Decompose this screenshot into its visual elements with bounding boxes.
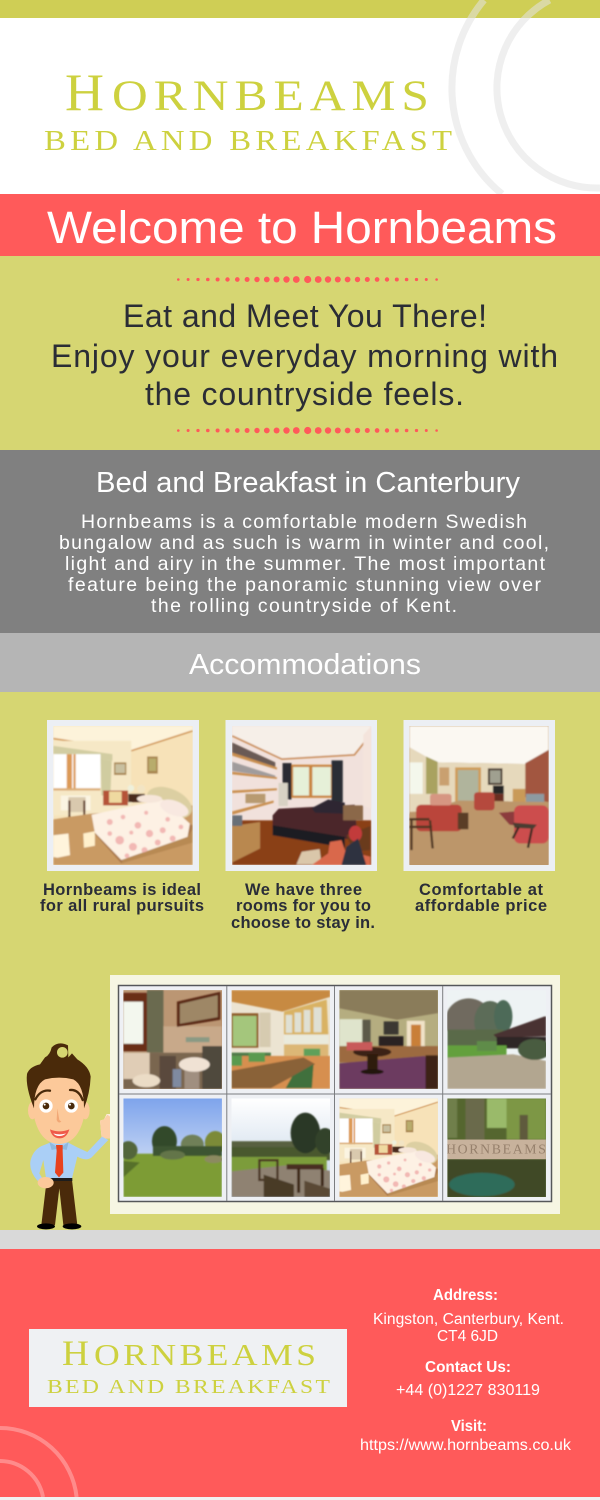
dotted divider bottom	[177, 427, 438, 434]
eyebrows	[35, 1090, 83, 1100]
welcome banner: Welcome to Hornbeams	[47, 202, 557, 253]
panel: accommodations background	[0, 692, 600, 1230]
hair	[27, 1043, 91, 1108]
tie	[55, 1145, 63, 1177]
contact details: +44 (0)1227 830119	[396, 1382, 540, 1399]
contact details: https://www.hornbeams.co.uk	[360, 1437, 571, 1454]
accommodations heading	[0, 633, 600, 692]
contact details: CT4 6JD	[437, 1328, 498, 1345]
photo: kitchen and dining	[232, 990, 330, 1089]
dotted divider top	[177, 276, 438, 283]
decorative footer rings	[0, 1428, 77, 1497]
contact details: Visit:	[451, 1418, 487, 1435]
photo card: bedroom one	[47, 720, 199, 871]
trousers	[41, 1180, 77, 1225]
eyes	[39, 1099, 78, 1113]
photo: hornbeams sign: HORNBEAMS	[446, 1141, 546, 1156]
caption: rural pursuits	[40, 881, 204, 915]
panel: bed and breakfast in Canterbury	[0, 450, 600, 633]
contact details: Contact Us:	[425, 1359, 511, 1376]
header band	[0, 0, 600, 194]
collar	[49, 1142, 69, 1150]
footer logo: H	[62, 1333, 89, 1373]
description text	[59, 511, 549, 617]
logo: Hornbeams Bed and Breakfast	[44, 64, 452, 156]
logo: Hornbeams Bed and Breakfast: BED AND BREAKFAST	[44, 125, 452, 156]
tagline text: Eat and Meet You There!	[123, 298, 487, 334]
footer panel	[0, 1249, 600, 1500]
photo: garden lawn	[123, 1098, 222, 1197]
contact details: Kingston, Canterbury, Kent.	[373, 1311, 564, 1328]
caption: three rooms	[231, 881, 375, 932]
footer logo: BED AND BREAKFAST	[47, 1374, 330, 1398]
tagline text: the countryside feels.	[145, 376, 464, 412]
mouth	[50, 1129, 69, 1138]
photo: house exterior	[447, 998, 546, 1089]
tagline text	[51, 298, 558, 412]
heading: Bed and Breakfast in Canterbury	[96, 467, 520, 499]
photo: bedroom repeat	[339, 1098, 441, 1197]
shoes	[37, 1223, 81, 1229]
caption: affordable price: affordable price	[415, 897, 547, 915]
footer logo: ORNBEAMS	[94, 1338, 316, 1372]
gallery frame	[110, 975, 560, 1214]
photo card: bedroom two	[226, 720, 377, 871]
description text: Hornbeams is a comfortable modern Swedish	[81, 511, 527, 533]
raised hand	[100, 1114, 117, 1138]
logo: Hornbeams Bed and Breakfast: ORNBEAMS	[112, 73, 429, 120]
character: waving cartoon man	[27, 1043, 117, 1229]
belt	[46, 1178, 72, 1181]
photo: patio and view	[232, 1098, 330, 1197]
left hand	[38, 1177, 54, 1188]
head	[27, 1043, 91, 1144]
description text: light and airy in the summer. The most important	[65, 553, 546, 575]
footer logo	[29, 1329, 347, 1407]
caption: rural pursuits: Hornbeams is ideal	[43, 881, 201, 899]
logo: Hornbeams Bed and Breakfast: H	[65, 64, 104, 122]
tagline panel	[0, 256, 600, 450]
description text: bungalow and as such is warm in winter and cool,	[59, 532, 549, 554]
separator band	[0, 1230, 600, 1249]
photo: hornbeams sign	[446, 1098, 546, 1197]
photo: bathroom	[123, 990, 222, 1089]
welcome banner	[0, 194, 600, 256]
contact details: Address:	[433, 1287, 498, 1304]
nose	[57, 1108, 61, 1123]
caption: rural pursuits: for all rural pursuits	[40, 897, 204, 915]
caption: three rooms: rooms for you to	[236, 897, 371, 915]
accommodations heading: Accommodations	[189, 649, 421, 681]
contact details	[360, 1287, 571, 1454]
caption: three rooms: choose to stay in.	[231, 914, 375, 932]
description text: the rolling countryside of Kent.	[151, 595, 457, 617]
caption: three rooms: We have three	[245, 881, 362, 899]
caption: affordable price	[415, 881, 547, 915]
photo card: living room	[404, 720, 555, 871]
caption: affordable price: Comfortable at	[419, 881, 544, 899]
shirt	[30, 1137, 108, 1181]
photo: dining lounge	[339, 990, 438, 1089]
decorative rings in header	[448, 0, 600, 194]
tagline text: Enjoy your everyday morning with	[51, 338, 558, 374]
description text: feature being the panoramic stunning view over	[68, 574, 542, 596]
